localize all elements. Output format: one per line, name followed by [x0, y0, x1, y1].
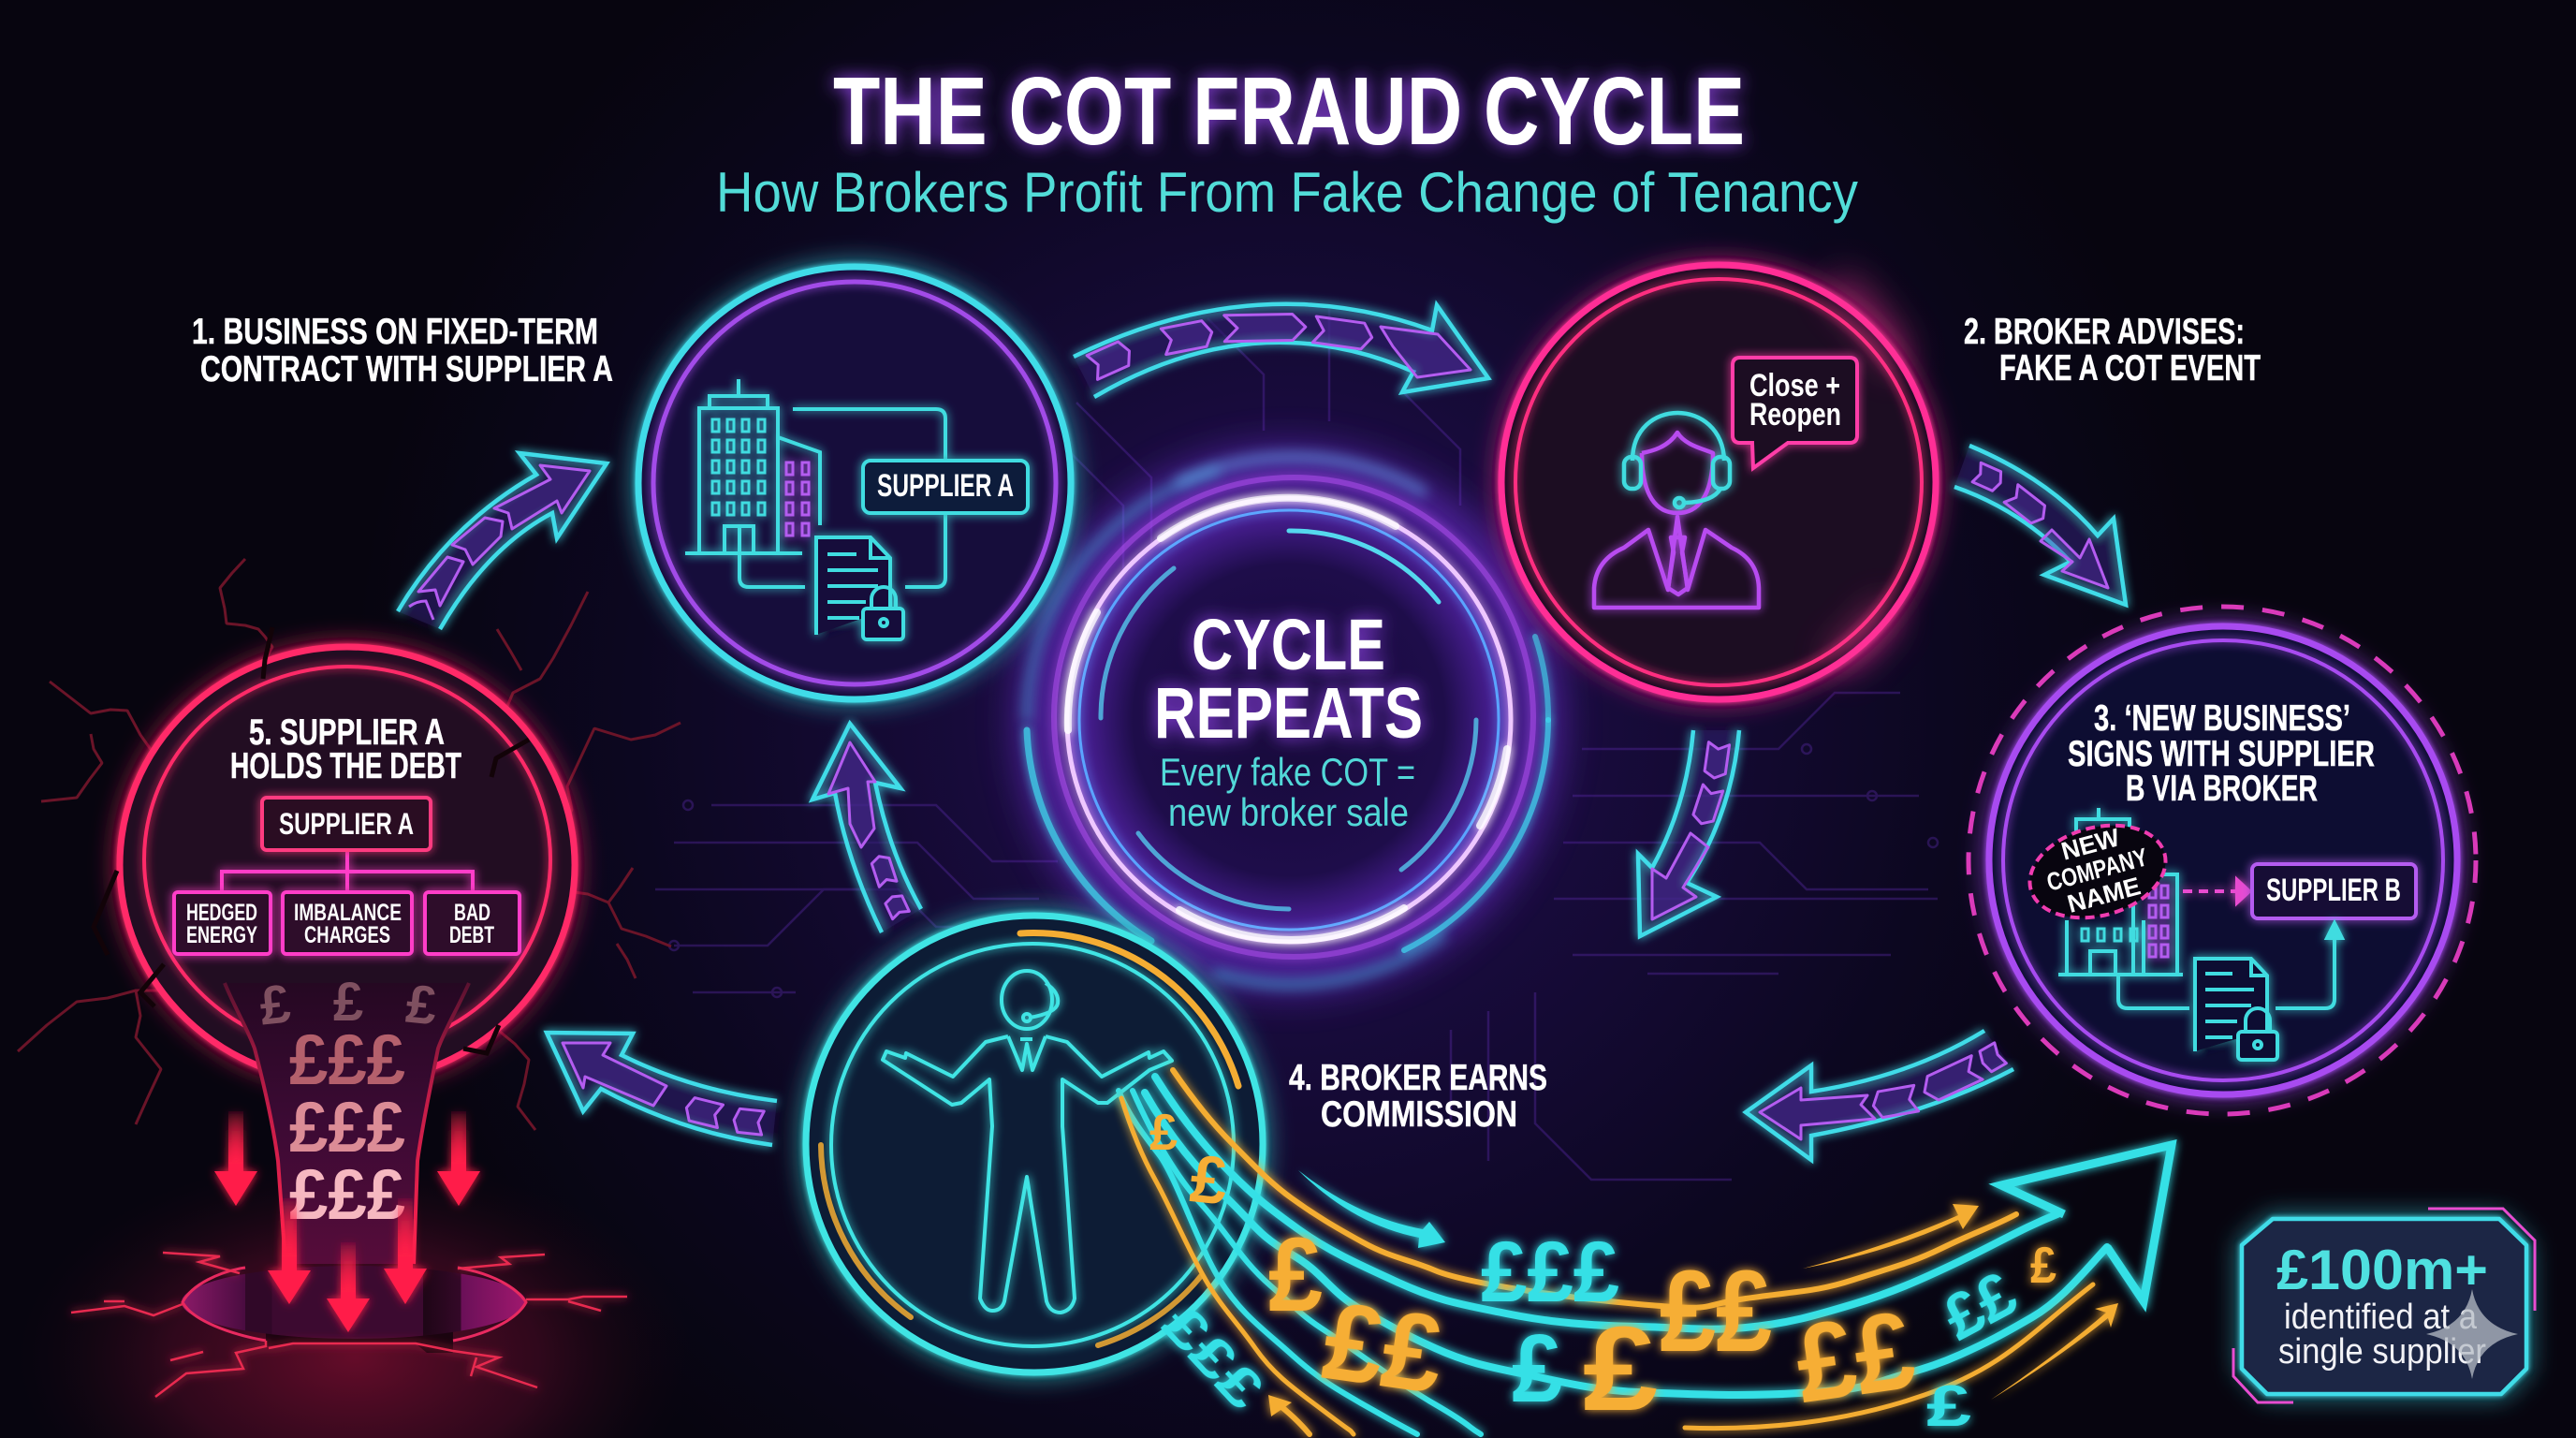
callout: £100m+ stat box: £100m+ — [2276, 1239, 2488, 1301]
step 2 label — [1964, 312, 2261, 389]
sinkhole — [71, 1253, 627, 1397]
bad debt box — [425, 892, 520, 954]
dark fractures in ring — [94, 627, 529, 1053]
red down arrows — [214, 1111, 480, 1332]
cycle repeats heading: REPEATS — [1154, 673, 1423, 754]
supplier A box — [262, 798, 431, 850]
money: pound signs — [1149, 1103, 2056, 1438]
circuit board background pattern — [655, 309, 1938, 1180]
arrow: step 3 to step 4 — [1746, 1031, 2013, 1160]
arrow: step 5 to step 1 — [398, 453, 607, 629]
icon: contract document with lock — [816, 537, 903, 639]
panel: step 5 supplier A debt — [18, 559, 692, 1438]
supplier B box — [2252, 864, 2416, 918]
title: THE COT FRAUD CYCLE — [833, 57, 1745, 165]
step 4 label: COMMISSION — [1321, 1094, 1517, 1135]
step 4 label — [1289, 1058, 1547, 1135]
bad debt box: DEBT — [449, 922, 494, 948]
hedged energy box: HEDGED — [186, 900, 257, 926]
lower orange flows — [1121, 1098, 2118, 1434]
falling pound signs: £££ — [289, 1088, 405, 1167]
money: pound signs: ££ — [1932, 1257, 2027, 1354]
step 2 label: FAKE A COT EVENT — [1999, 348, 2261, 389]
icon: renamed building — [2058, 808, 2183, 975]
panel: step 2 circle — [1501, 265, 1936, 699]
icon: sparkle — [2426, 1289, 2518, 1379]
cycle repeats heading — [1154, 605, 1423, 754]
subtitle: How Brokers Profit From Fake Change of Tenancy — [716, 161, 1858, 224]
money: pound signs: £ — [1187, 1141, 1231, 1220]
debt hierarchy connectors — [222, 850, 473, 892]
money: pound signs: ££ — [1660, 1248, 1772, 1376]
close and reopen speech bubble — [1733, 358, 1857, 468]
money: pound signs: £££ — [1151, 1294, 1275, 1421]
cycle repeats caption: Every fake COT = — [1160, 750, 1415, 794]
arrow: step 4 to step 5 — [547, 1033, 777, 1145]
panel: step 3 circle — [1969, 607, 2476, 1114]
cycle repeats caption: new broker sale — [1168, 790, 1409, 834]
close and reopen speech bubble: Close + — [1749, 368, 1840, 404]
supplier A box: SUPPLIER A — [279, 807, 414, 841]
callout: £100m+ stat box: single supplier — [2278, 1332, 2486, 1372]
falling pound signs: £ — [403, 973, 440, 1037]
step 5 label: HOLDS THE DEBT — [230, 746, 461, 786]
hedged energy box: ENERGY — [186, 922, 257, 948]
step 1 label — [192, 312, 613, 389]
money: pound signs: £ — [1149, 1103, 1178, 1161]
cyan rising arrow bands — [1119, 1077, 2172, 1434]
close and reopen speech bubble: Reopen — [1749, 397, 1841, 433]
falling pound signs: £££ — [289, 1155, 405, 1235]
step 3 label: 3. ‘NEW BUSINESS’ — [2094, 698, 2350, 739]
money: pound signs: £ — [1583, 1302, 1658, 1436]
arrow: step 2 down toward centre — [1638, 730, 1739, 936]
step 4 label: 4. BROKER EARNS — [1289, 1058, 1547, 1098]
step 3 label: SIGNS WITH SUPPLIER — [2068, 734, 2375, 774]
step 2 label: 2. BROKER ADVISES: — [1964, 312, 2245, 352]
imbalance charges box: CHARGES — [304, 922, 390, 948]
bad debt box: BAD — [454, 900, 490, 926]
money: pound signs: £ — [1512, 1314, 1562, 1422]
step 3 label: B VIA BROKER — [2126, 769, 2318, 809]
step 5 label: 5. SUPPLIER A — [249, 712, 445, 753]
bright white arcs — [1161, 498, 1396, 538]
connector lines — [2118, 923, 2342, 1008]
step 1 label: 1. BUSINESS ON FIXED-TERM — [192, 312, 598, 352]
new company name badge: NAME — [2064, 872, 2144, 918]
dashed arrow to supplier B — [2183, 880, 2249, 902]
step 3 label — [2068, 698, 2375, 809]
panel: central cycle repeats ring — [1027, 457, 1548, 984]
money: pound signs: £ — [2030, 1236, 2056, 1294]
cycle repeats caption — [1160, 750, 1415, 834]
cracks — [18, 559, 681, 1130]
new company name badge: NEW — [2058, 823, 2123, 866]
new company name badge — [2019, 811, 2176, 932]
money: pound signs: £££ — [1481, 1225, 1619, 1320]
supplier B box: SUPPLIER B — [2266, 873, 2401, 908]
hedged energy box — [174, 892, 271, 954]
connector lines — [739, 409, 945, 587]
step 1 label: CONTRACT WITH SUPPLIER A — [200, 349, 613, 389]
falling pound signs: £ — [333, 972, 363, 1033]
icon: contract document with lock — [2195, 959, 2277, 1060]
icon: office building — [685, 379, 820, 553]
callout: £100m+ stat box — [2233, 1209, 2535, 1402]
arrow: step 2 to step 3 — [1954, 446, 2126, 605]
money: pound signs: ££ — [1316, 1279, 1450, 1417]
money: pound signs: £ — [1268, 1216, 1323, 1333]
supplier A box: SUPPLIER A — [877, 468, 1014, 504]
money: pound signs: ££ — [1789, 1288, 1922, 1427]
funnel of draining money — [225, 983, 469, 1264]
callout: £100m+ stat box: identified at a — [2284, 1298, 2478, 1337]
icon: broker with headset — [1594, 413, 1759, 608]
chart: money flow arrows — [1119, 1070, 2172, 1434]
money: pound signs: £ — [1926, 1374, 1971, 1438]
arrow: step 1 to step 2 — [1074, 304, 1488, 397]
step 5 label — [230, 712, 461, 786]
small cyan arrow — [1298, 1170, 1445, 1248]
arrow: step 4 to step 1 — [812, 724, 921, 932]
imbalance charges box — [283, 892, 412, 954]
falling pound signs — [256, 972, 440, 1235]
cycle repeats heading: CYCLE — [1192, 605, 1385, 685]
supplier A box — [863, 461, 1028, 513]
panel: step 4 broker circle — [806, 916, 1263, 1372]
falling pound signs: £ — [256, 973, 293, 1037]
inner cyan arcs — [1289, 531, 1439, 602]
red ground glow around sinkhole — [18, 1155, 692, 1438]
new company name badge: COMPANY — [2043, 843, 2150, 897]
orange accent arcs — [821, 933, 1238, 1345]
panel: step 1 circle — [638, 267, 1071, 699]
orange commission flow — [1173, 1070, 2016, 1308]
falling pound signs: £££ — [289, 1020, 405, 1100]
icon: shrugging broker figure — [883, 971, 1172, 1313]
imbalance charges box: IMBALANCE — [294, 900, 402, 926]
